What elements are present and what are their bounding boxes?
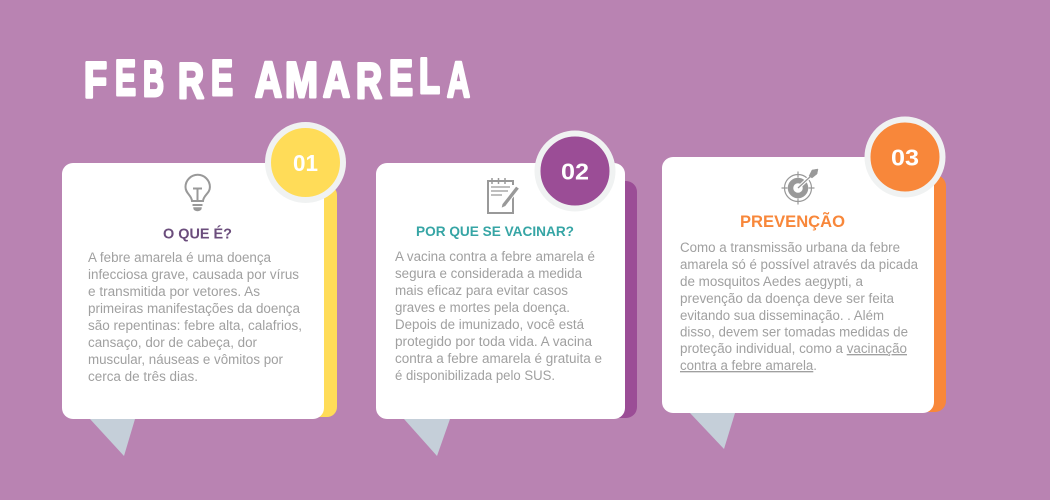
number badge 02 bbox=[538, 134, 612, 208]
body text: contra a febre amarela. bbox=[680, 358, 817, 373]
icon: notepad and pencil bbox=[488, 178, 520, 213]
white card bbox=[662, 157, 934, 413]
orange backing bbox=[900, 175, 946, 412]
title: L bbox=[419, 48, 440, 104]
body text: amarela só é possível através da picada bbox=[680, 257, 919, 272]
body text: Como a transmissão urbana da febre bbox=[680, 240, 900, 255]
body text: cerca de três dias. bbox=[88, 369, 198, 384]
body text: cansaço, dor de cabeça, dor bbox=[88, 335, 258, 350]
body text: Depois de imunizado, você está bbox=[395, 317, 585, 332]
number badge 02: 02 bbox=[561, 158, 589, 184]
title: R bbox=[356, 53, 382, 109]
title: E bbox=[389, 50, 413, 106]
speech tail bbox=[90, 419, 135, 456]
number badge 03: 03 bbox=[891, 144, 919, 170]
body text: proteção individual, como a vacinação bbox=[680, 341, 907, 356]
body text: é disponibilizada pelo SUS. bbox=[395, 368, 555, 383]
purple backing bbox=[590, 181, 637, 418]
icon: target and arrow bbox=[782, 169, 818, 204]
yellow backing bbox=[280, 185, 337, 417]
body text: graves e mortes pela doença. bbox=[395, 300, 570, 315]
white card bbox=[376, 163, 625, 419]
body text: infecciosa grave, causada por vírus bbox=[88, 267, 299, 282]
panel: por que se vacinar bbox=[376, 134, 637, 456]
heading: por que se vacinar: POR QUE SE VACINAR? bbox=[416, 223, 574, 239]
body text bbox=[680, 240, 919, 373]
body text: são repentinas: febre alta, calafrios, bbox=[88, 318, 302, 333]
panel: o que é bbox=[62, 125, 343, 456]
title: F bbox=[84, 52, 107, 108]
title: A bbox=[447, 52, 470, 108]
body text: evitando sua disseminação. . Além bbox=[680, 308, 884, 323]
body text: prevenção da doença deve ser feita bbox=[680, 291, 895, 306]
title: E bbox=[211, 50, 233, 106]
body text: mais eficaz para evitar casos bbox=[395, 283, 568, 298]
body text: de mosquitos Aedes aegypti, a bbox=[680, 274, 864, 289]
panel: prevenção bbox=[662, 120, 946, 449]
body text: muscular, náuseas e vômitos por bbox=[88, 352, 284, 367]
speech tail bbox=[690, 413, 735, 449]
body text: protegido por toda vida. A vacina bbox=[395, 334, 593, 349]
heading: o que é: O QUE É? bbox=[163, 226, 232, 242]
title: B bbox=[143, 51, 164, 107]
title bbox=[84, 48, 470, 109]
speech tail bbox=[404, 419, 450, 456]
white card bbox=[62, 163, 324, 419]
body text: segura e considerada a medida bbox=[395, 266, 583, 281]
title: R bbox=[178, 53, 204, 109]
heading: prevenção: PREVENÇÃO bbox=[740, 211, 845, 231]
number badge 01 bbox=[268, 125, 343, 200]
title: A bbox=[255, 52, 282, 108]
body text: primeiras manifestações da doença bbox=[88, 301, 301, 316]
title: E bbox=[115, 50, 136, 106]
body text: A vacina contra a febre amarela é bbox=[395, 249, 595, 264]
number badge 01: 01 bbox=[293, 150, 318, 176]
body text: A febre amarela é uma doença bbox=[88, 250, 272, 265]
body text bbox=[88, 250, 302, 384]
body text: disso, devem ser tomadas medidas de bbox=[680, 324, 908, 340]
number badge 03 bbox=[868, 120, 942, 194]
body text bbox=[395, 249, 602, 383]
title: A bbox=[323, 52, 350, 108]
body text: e transmitida por vetores. As bbox=[88, 284, 260, 299]
icon: light bulb bbox=[186, 175, 210, 211]
body text: contra a febre amarela é gratuita e bbox=[395, 351, 602, 366]
title: M bbox=[285, 52, 318, 108]
